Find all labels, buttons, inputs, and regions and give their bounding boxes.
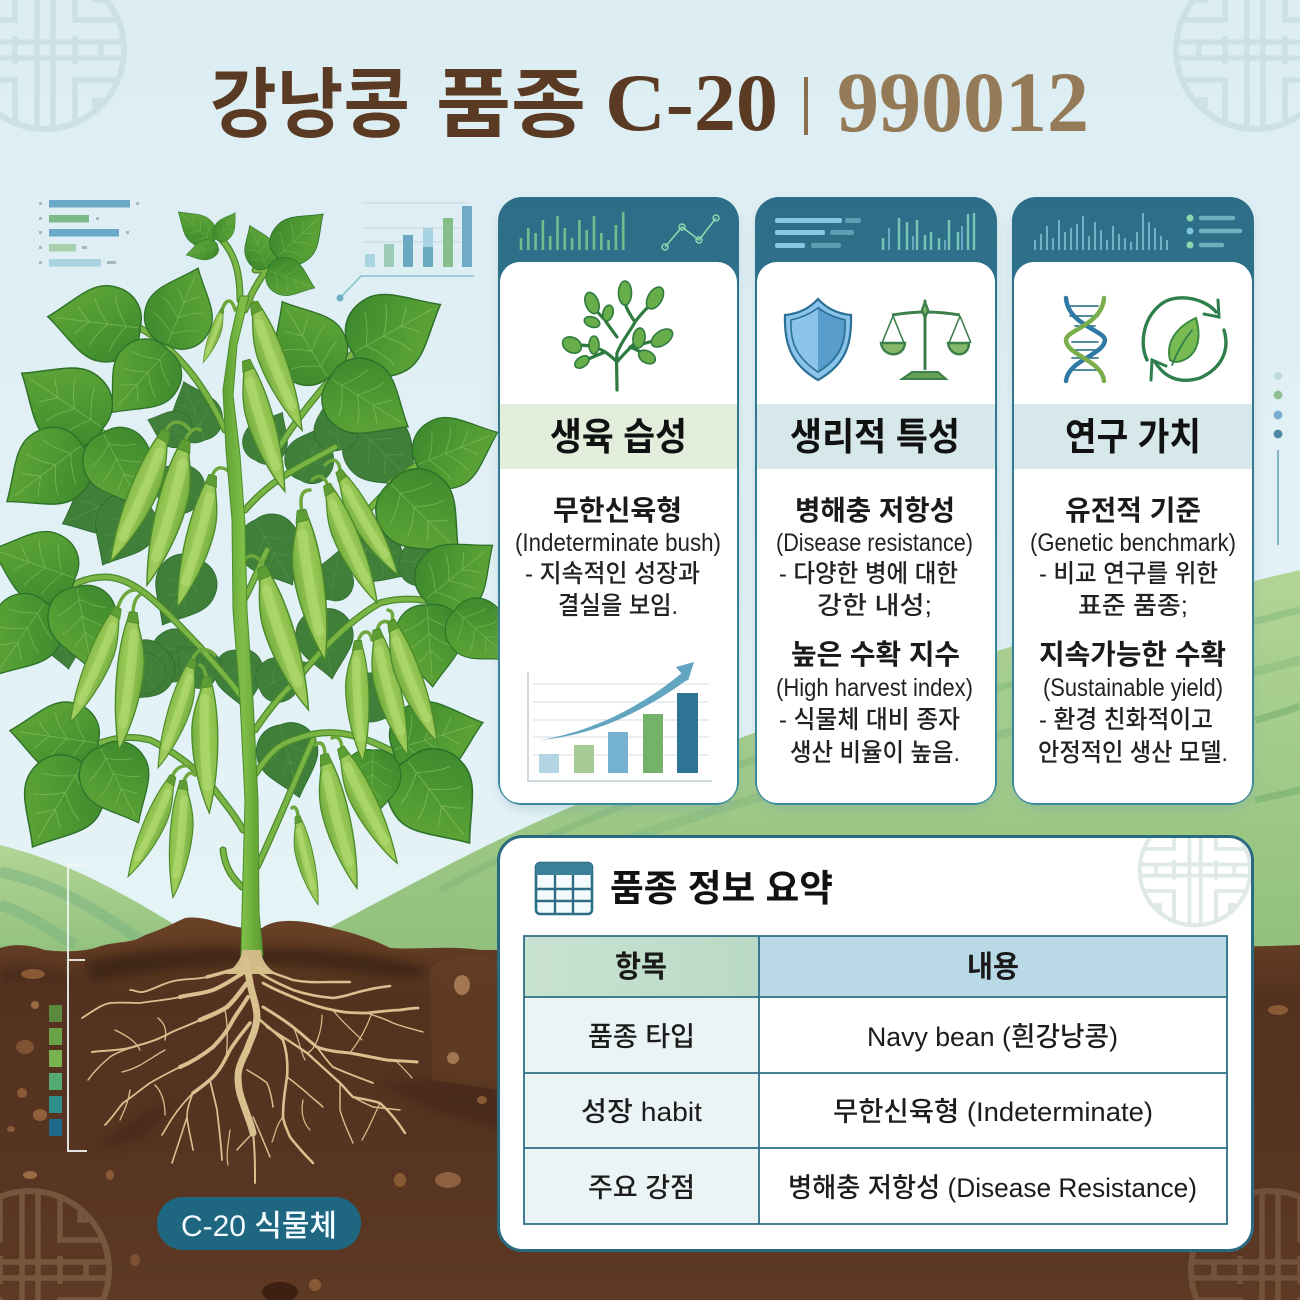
card header bbox=[755, 197, 997, 805]
main stem bbox=[223, 296, 263, 955]
body text bbox=[776, 495, 973, 767]
title: 990012 bbox=[837, 54, 1089, 150]
row: growth habit bbox=[581, 1097, 1153, 1127]
body text: (Genetic benchmark) bbox=[1030, 529, 1236, 557]
body text: 병해충 저항성 bbox=[795, 495, 955, 526]
body text: 무한신육형 bbox=[553, 495, 682, 526]
row: main strength: 주요 강점 bbox=[588, 1173, 695, 1203]
pods bbox=[62, 299, 446, 907]
card shadow bbox=[500, 205, 737, 809]
card shadow bbox=[757, 205, 995, 809]
panel: growth habit bbox=[498, 197, 739, 809]
roots bbox=[82, 950, 423, 1183]
body text: (Sustainable yield) bbox=[1043, 674, 1223, 702]
green hills bbox=[0, 570, 1300, 960]
heading: 생육 습성 bbox=[550, 417, 687, 459]
body text: (High harvest index) bbox=[776, 674, 973, 702]
lattice ornament inside panel bbox=[1138, 838, 1251, 928]
section heading band bbox=[500, 404, 737, 469]
decorative bar list, top left bbox=[39, 200, 139, 266]
lattice ornament: top right bbox=[1176, 0, 1300, 129]
lattice ornament: bottom left bbox=[0, 1191, 109, 1300]
body text: - 식물체 대비 종자 bbox=[779, 706, 960, 734]
icon: table bbox=[536, 863, 592, 914]
heading: 생리적 특성 bbox=[790, 417, 960, 459]
leaves bbox=[0, 197, 530, 869]
body text: (Disease resistance) bbox=[776, 529, 973, 557]
icon: branching plant bbox=[560, 281, 676, 390]
lattice ornament: top left bbox=[0, 0, 124, 129]
chart: rising bars with arrow bbox=[528, 662, 712, 781]
branches bbox=[50, 240, 457, 887]
plant: bean plant with roots, leaves and pods bbox=[0, 197, 530, 1183]
title: 강낭콩 bbox=[210, 63, 410, 148]
row: variety type: 품종 타입 bbox=[588, 1022, 695, 1052]
row: variety type bbox=[588, 1022, 1118, 1052]
row: growth habit: 성장 habit bbox=[581, 1097, 703, 1127]
icon: shield bbox=[785, 299, 851, 380]
body text: 유전적 기준 bbox=[1065, 495, 1201, 526]
panel: physiological traits bbox=[755, 197, 997, 809]
title: 품종 bbox=[436, 63, 586, 148]
lattice ornament: bottom right bbox=[1191, 1191, 1300, 1300]
side dots decoration bbox=[1274, 372, 1282, 545]
icon: leaf with recycle arrows bbox=[1143, 298, 1226, 380]
panel: variety information summary bbox=[498, 815, 1252, 1250]
plant label pill: C-20 식물체 bbox=[181, 1210, 337, 1243]
plant label pill bbox=[157, 1197, 361, 1250]
icon: balance scale bbox=[881, 300, 971, 379]
body text: - 비교 연구를 위한 bbox=[1039, 560, 1218, 588]
body text: 안정적인 생산 모델. bbox=[1038, 739, 1228, 767]
table header: 항목 bbox=[615, 951, 667, 984]
heading: 연구 가치 bbox=[1065, 417, 1201, 459]
title: C-20 bbox=[605, 57, 778, 148]
section heading band bbox=[757, 404, 995, 469]
body text bbox=[1030, 495, 1236, 767]
section heading band bbox=[1014, 404, 1252, 469]
body text: 생산 비율이 높음. bbox=[790, 739, 960, 767]
table bbox=[524, 936, 1227, 1224]
row: main strength bbox=[588, 1173, 1197, 1203]
body text: 강한 내성; bbox=[817, 592, 932, 620]
back foliage bbox=[40, 373, 458, 805]
depth ruler with colour scale bbox=[49, 865, 87, 1151]
body text: 높은 수확 지수 bbox=[791, 639, 960, 670]
row: variety type: Navy bean (흰강낭콩) bbox=[867, 1022, 1118, 1052]
title bbox=[210, 54, 1089, 150]
soil ground bbox=[0, 917, 1300, 1300]
body text bbox=[515, 495, 721, 620]
body text: 표준 품종; bbox=[1078, 592, 1188, 620]
decorative bar chart, top right of plant bbox=[336, 203, 474, 302]
card shadow bbox=[1014, 205, 1252, 809]
body text: - 환경 친화적이고 bbox=[1039, 706, 1213, 734]
body text: 결실을 보임. bbox=[558, 592, 678, 620]
body text: 지속가능한 수확 bbox=[1039, 639, 1226, 670]
panel: research value bbox=[1012, 197, 1254, 809]
body text: (Indeterminate bush) bbox=[515, 529, 721, 557]
card header bbox=[1012, 197, 1254, 805]
row: growth habit: 무한신육형 (Indeterminate) bbox=[833, 1097, 1153, 1127]
panel heading: 품종 정보 요약 bbox=[610, 868, 833, 909]
card header bbox=[498, 197, 739, 805]
table header: 내용 bbox=[967, 951, 1019, 984]
body text: - 다양한 병에 대한 bbox=[779, 560, 958, 588]
row: main strength: 병해충 저항성 (Disease Resistance) bbox=[788, 1173, 1197, 1203]
body text: - 지속적인 성장과 bbox=[525, 560, 700, 588]
table header bbox=[615, 951, 1019, 984]
icon: DNA helix bbox=[1066, 298, 1105, 381]
